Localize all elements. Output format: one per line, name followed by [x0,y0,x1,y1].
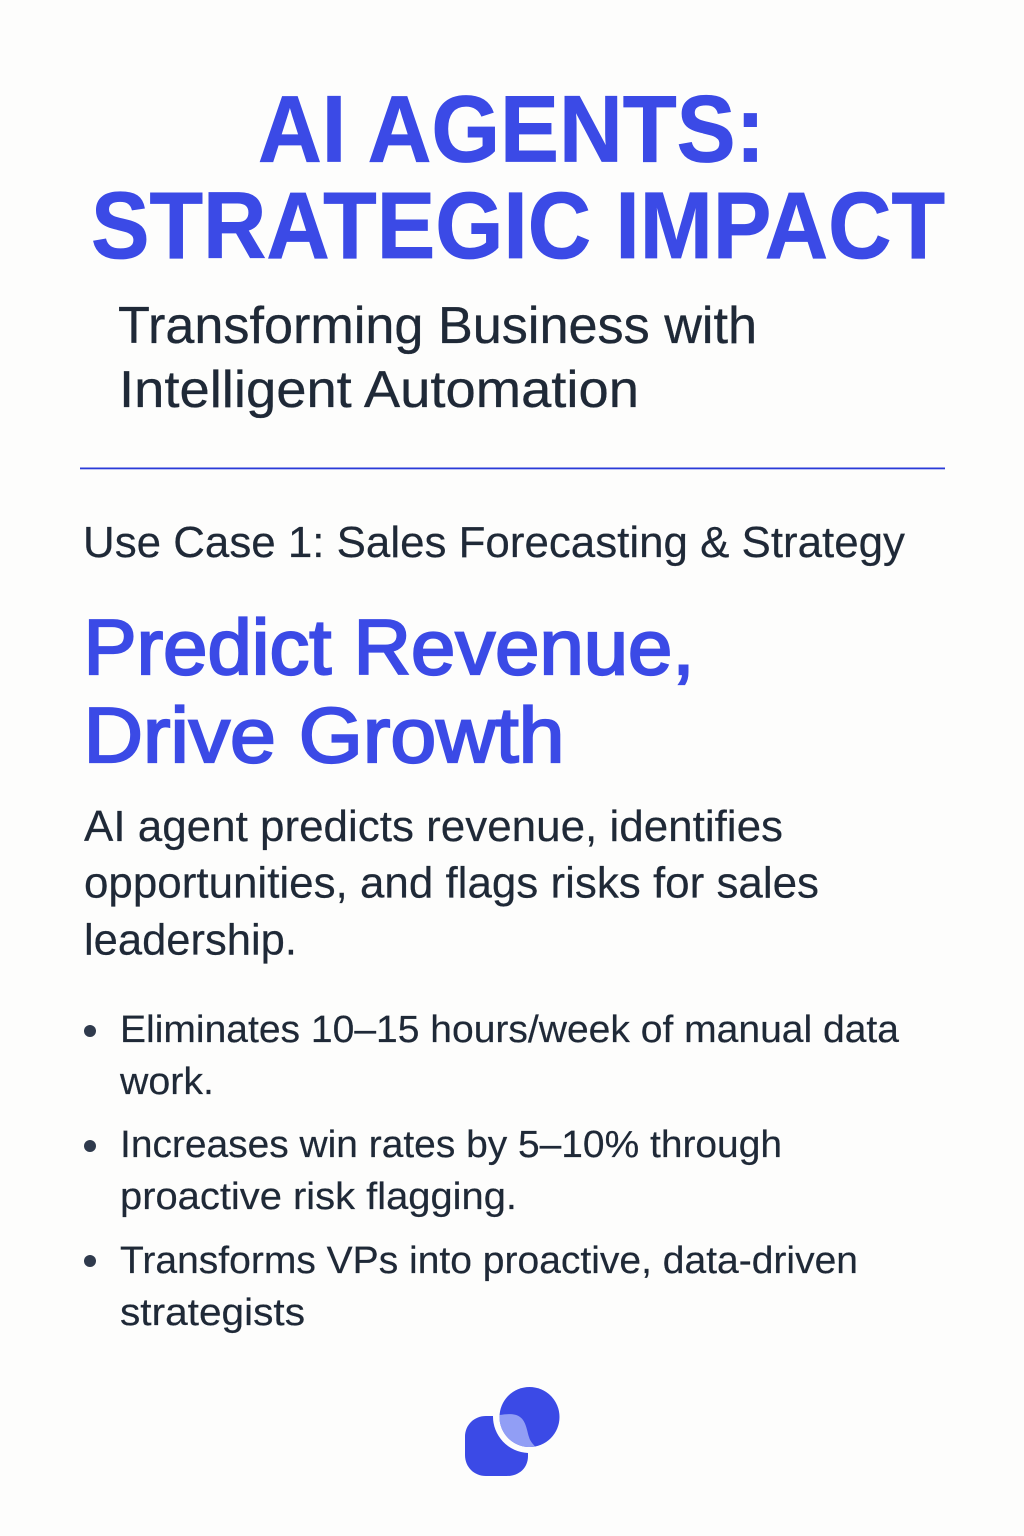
description text: opportunities, and flags risks for sales [84,858,819,908]
bullet list [84,1009,900,1334]
use case label: Use Case 1: Sales Forecasting & Strategy [83,518,905,567]
title: AI AGENTS: [258,76,765,182]
section heading: Predict Revenue, [84,603,694,691]
bullet 3: Transforms VPs into proactive, data-driven [120,1240,858,1282]
subtitle: Intelligent Automation [119,361,639,419]
subtitle: Transforming Business with [118,297,757,355]
bullet 3: strategists [120,1292,305,1334]
bullet 2: proactive risk flagging. [120,1176,517,1218]
bullet 1 [84,1009,900,1103]
title [91,76,945,279]
section heading [84,603,694,779]
description text [84,802,819,964]
bullet 1: work. [119,1061,214,1103]
icon: logo [465,1387,560,1476]
subtitle [118,297,757,419]
bullet 2: Increases win rates by 5–10% through [120,1124,782,1166]
section heading: Drive Growth [84,691,564,779]
description text: AI agent predicts revenue, identifies [84,802,783,851]
description text: leadership. [84,916,297,964]
bullet 3 [84,1240,858,1334]
bullet 2 [84,1124,782,1218]
bullet 1: Eliminates 10–15 hours/week of manual data [120,1009,900,1051]
title: STRATEGIC IMPACT [91,173,945,279]
